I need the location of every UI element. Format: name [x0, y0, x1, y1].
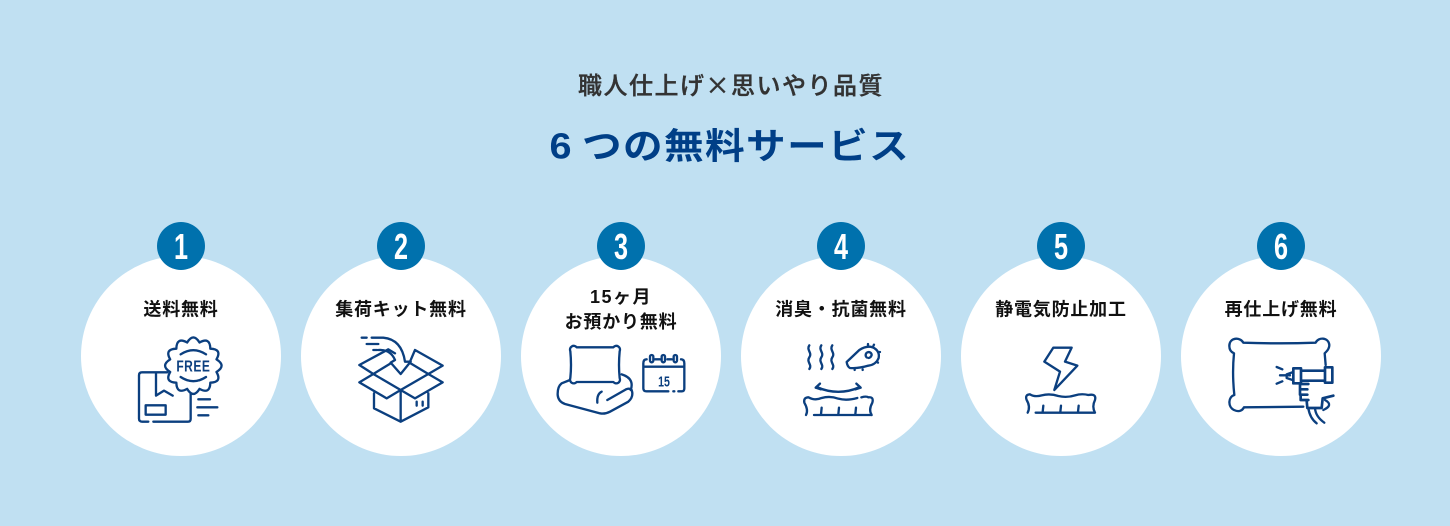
icon: odour, germ and mattress	[804, 344, 880, 415]
number badge 5	[1037, 222, 1085, 270]
icon: parcel with free badge	[139, 337, 222, 422]
number badge 2	[377, 222, 425, 270]
label: 15 month storage: 15ヶ月	[590, 287, 652, 307]
label: 15 month storage: お預かり無料	[565, 312, 677, 332]
subtitle: 職人仕上げ×思いやり品質	[578, 66, 884, 101]
icon: pillow, blanket and calendar	[558, 346, 684, 414]
panel: service 5 antistatic	[961, 222, 1161, 456]
number badge 3	[597, 222, 645, 270]
panel: service 1 free shipping	[81, 222, 281, 456]
title: 6	[550, 127, 573, 167]
icon: lightning bolt on mattress	[1026, 348, 1095, 413]
label: 15 month storage	[565, 287, 677, 332]
label: free shipping: 送料無料	[143, 300, 219, 320]
icon: open box with arrow	[359, 338, 443, 422]
number badge 6: 6	[1274, 227, 1288, 267]
number badge 5: 5	[1054, 227, 1068, 267]
label: deodorising and antibacterial: 消臭・抗菌無料	[775, 300, 907, 320]
number badge 3: 3	[614, 227, 628, 267]
panel: service 3 storage	[521, 222, 721, 456]
number badge 1	[157, 222, 205, 270]
label: refinishing: 再仕上げ無料	[1225, 300, 1337, 320]
label: antistatic finish: 静電気防止加工	[995, 298, 1127, 320]
title: つの無料サービス	[582, 127, 910, 167]
number badge 6	[1257, 222, 1305, 270]
panel: service 4 deodorising	[741, 222, 941, 456]
icon: pillow and hand dryer	[1229, 339, 1333, 423]
icon: parcel with free badge: FREE	[176, 357, 210, 375]
number badge 1: 1	[174, 227, 188, 267]
panel: service 2 collection kit	[301, 222, 501, 456]
number badge 4: 4	[834, 227, 849, 267]
panel: service 6 refinishing	[1181, 222, 1381, 456]
number badge 2: 2	[394, 227, 408, 267]
icon: pillow, blanket and calendar: 15	[658, 373, 670, 390]
number badge 4	[817, 222, 865, 270]
label: collection kit: 集荷キット無料	[335, 300, 467, 320]
